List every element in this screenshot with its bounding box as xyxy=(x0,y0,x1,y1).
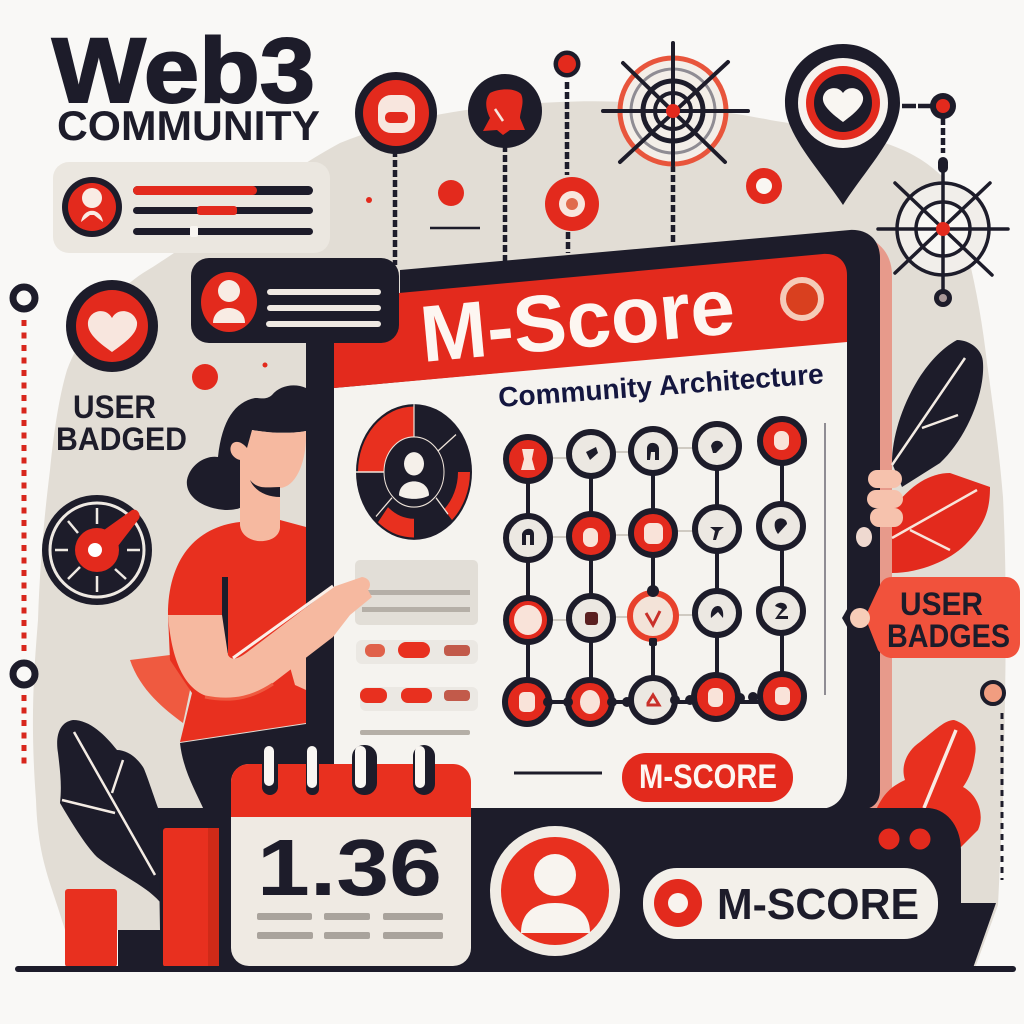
figure: person presenting xyxy=(130,385,306,810)
label: user badged xyxy=(56,389,187,457)
icon: gauge xyxy=(42,495,152,605)
icon: red leaf xyxy=(892,473,990,573)
button: m-score small xyxy=(622,753,793,802)
calendar: 1.36 xyxy=(231,745,471,966)
icon: top node xyxy=(554,50,580,78)
button: m-score small: M-SCORE xyxy=(639,758,777,796)
tag: user badges: USER xyxy=(900,586,983,622)
heading: community architecture: Community Architecture xyxy=(497,358,825,413)
neck and face xyxy=(230,430,306,541)
small node right lower xyxy=(982,682,1004,880)
small header icon xyxy=(783,280,821,318)
label: user badged: USER xyxy=(73,389,156,425)
label: user badged: BADGED xyxy=(56,421,187,457)
baseline xyxy=(15,966,1016,972)
panel: bottom dark bar xyxy=(118,808,996,968)
hair xyxy=(187,385,306,510)
title: Web3 xyxy=(52,20,315,122)
title: COMMUNITY xyxy=(57,102,320,149)
connector lines xyxy=(395,82,943,265)
sleeve tail xyxy=(130,655,190,723)
torso xyxy=(168,520,306,742)
shirt fold xyxy=(222,577,228,653)
right hand holding tablet xyxy=(867,470,903,527)
tag: user badges: BADGES xyxy=(887,618,1010,654)
tablet side button xyxy=(856,527,872,547)
icon: heart badge xyxy=(66,280,158,372)
button: m-score large: M-SCORE xyxy=(717,880,919,929)
icon: small node right xyxy=(930,93,956,119)
figure: presenting arm xyxy=(168,577,372,699)
speech card: user list xyxy=(191,258,399,343)
screen header xyxy=(334,254,847,388)
icon: top badge shield xyxy=(468,74,542,148)
bar chart: lower left xyxy=(65,828,219,967)
legs xyxy=(180,724,306,810)
panel: paper with buttons xyxy=(355,560,478,735)
grid: community node graph xyxy=(505,419,804,724)
heading: m-score: M-Score xyxy=(416,261,738,379)
icon: black leaf xyxy=(892,340,983,487)
pie chart xyxy=(356,404,472,540)
left dotted timeline xyxy=(13,287,35,765)
icon: red plant lower right xyxy=(876,720,981,847)
calendar: 1.36: 1.36 xyxy=(257,823,442,912)
panel: main tablet screen xyxy=(306,230,880,810)
button: m-score large xyxy=(643,868,938,939)
tablet edge highlight xyxy=(859,238,892,810)
icon: top badge face xyxy=(355,72,437,154)
icon: network web xyxy=(878,157,1008,307)
icon: target web xyxy=(603,43,748,165)
icon: black plant lower left xyxy=(57,720,175,902)
chin shadow xyxy=(250,480,280,497)
panel: top-left profile card xyxy=(53,162,330,253)
small floating dots xyxy=(192,168,782,390)
waist skin xyxy=(290,655,306,690)
icon: map pin with heart xyxy=(785,44,900,205)
right inner rule xyxy=(824,423,826,695)
icon: avatar circle xyxy=(490,826,620,956)
tag: user badges xyxy=(842,577,1020,658)
line beside small button xyxy=(514,772,602,774)
